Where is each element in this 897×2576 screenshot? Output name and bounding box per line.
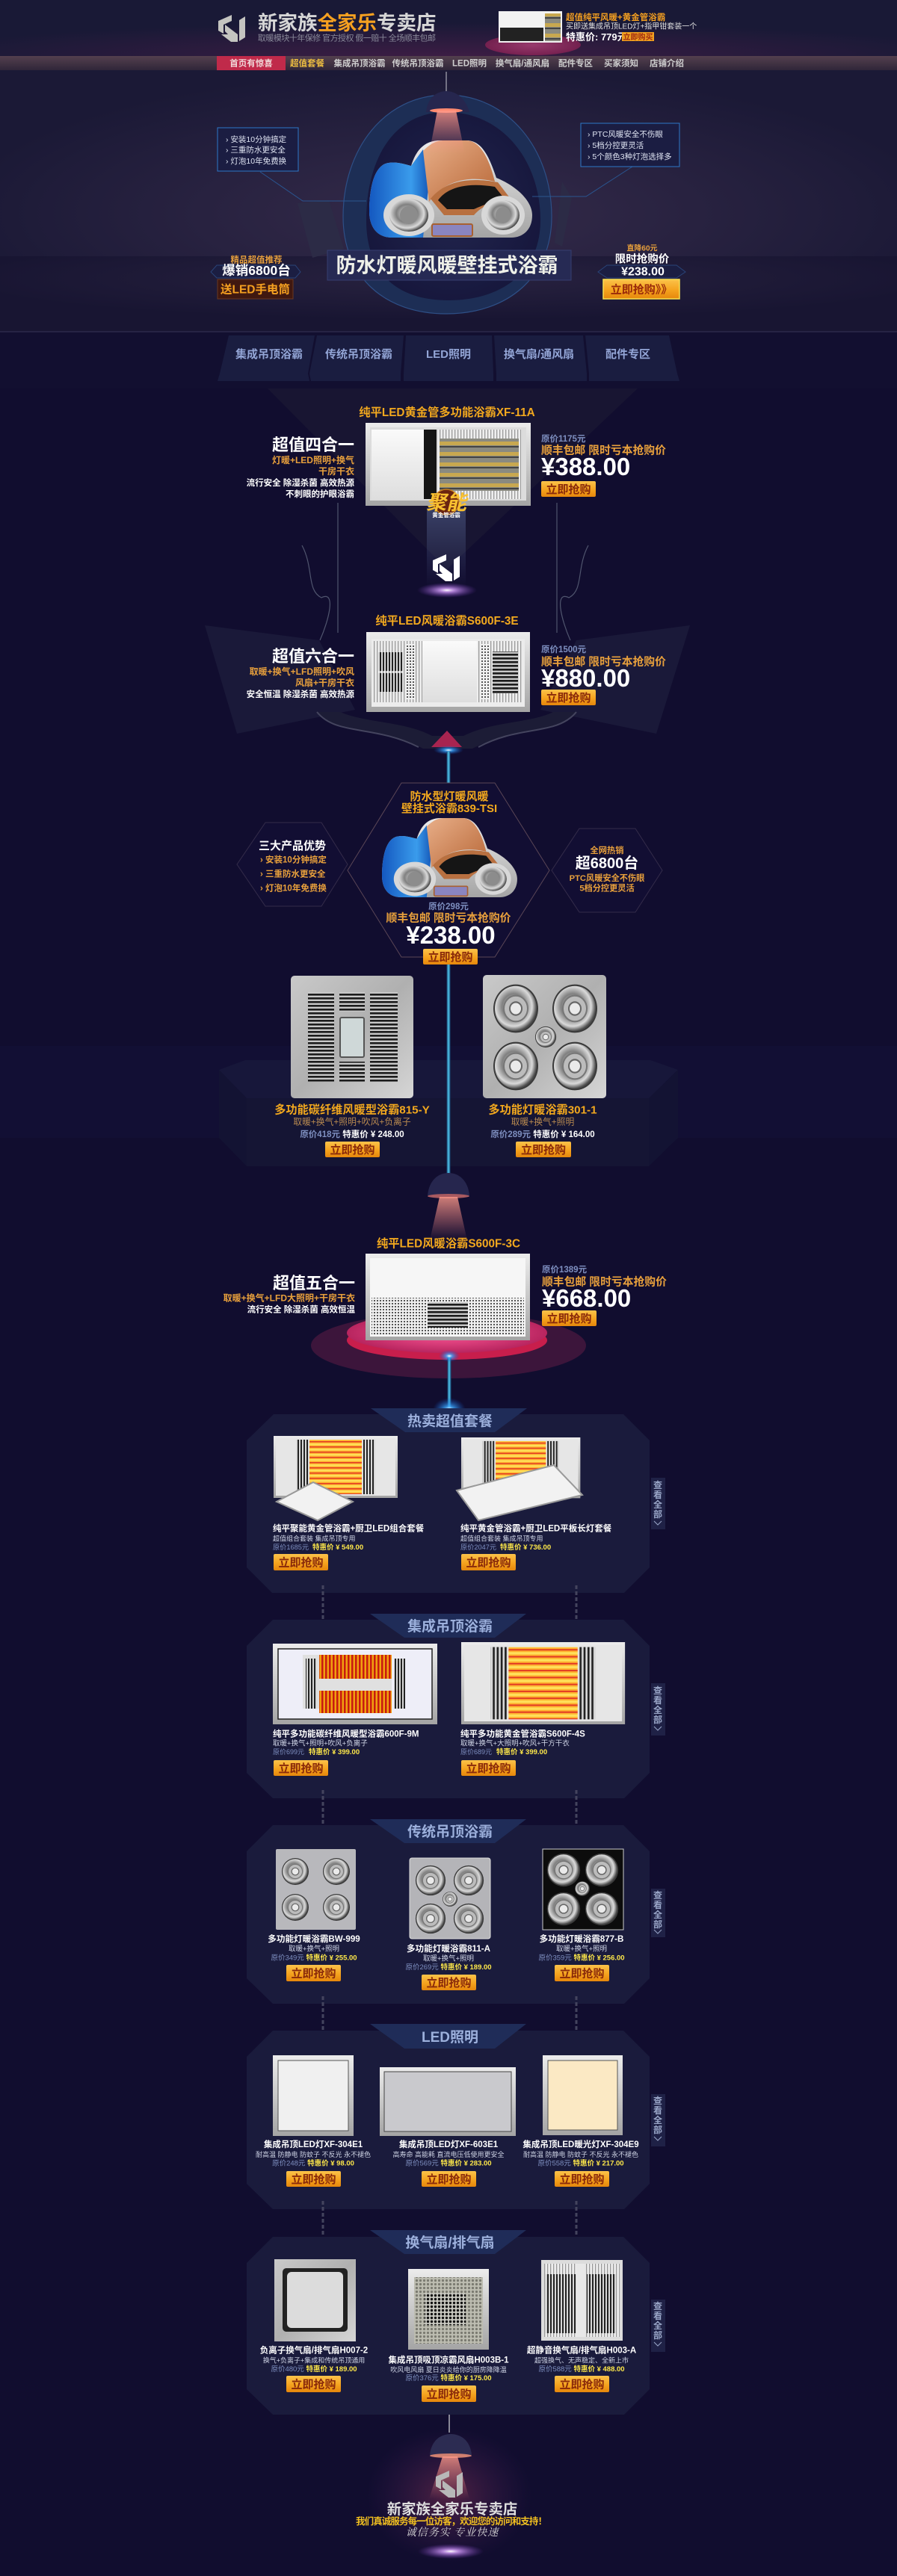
product XF-304E1 text bbox=[256, 2139, 371, 2187]
hero left badge: 送LED手电筒 bbox=[221, 282, 290, 296]
footer bbox=[356, 2415, 547, 2563]
view all tab: 全 bbox=[653, 2114, 662, 2125]
hero product bbox=[369, 140, 532, 238]
view all tab bbox=[651, 1889, 665, 1937]
bundle 1 text: 原价1685元 bbox=[273, 1544, 309, 1551]
store slogan: 取暖模块十年保修 官方授权 假一赔十 全场顺丰包邮 bbox=[258, 33, 436, 43]
product H003B-1 text: 原价376元 特惠价 ¥ 175.00 bbox=[405, 2374, 492, 2383]
navigation bar: 店铺介绍 bbox=[650, 58, 684, 69]
815-Y image bbox=[291, 976, 413, 1098]
product H003-A image bbox=[541, 2260, 623, 2341]
navigation bar: 超值套餐 bbox=[290, 58, 324, 69]
product H007-2 text: 原价480元 特惠价 ¥ 189.00 bbox=[271, 2365, 357, 2374]
banner bbox=[371, 1408, 527, 1432]
product 811-A text: 多功能灯暖浴霸811-A bbox=[407, 1943, 491, 1954]
centre price: ¥238.00 bbox=[406, 921, 496, 949]
chains 1 bbox=[323, 1585, 576, 1632]
navigation bar: 集成吊顶浴霸 bbox=[333, 58, 386, 69]
right callout connector bbox=[532, 167, 632, 196]
product H007-2 text: 立即抢购 bbox=[291, 2377, 336, 2391]
centre price: 立即抢购 bbox=[428, 950, 473, 964]
navigation bar: 首页有惊喜 bbox=[229, 58, 273, 69]
side metallic ornaments bbox=[302, 503, 588, 640]
category tabs: 换气扇/通风扇 bbox=[504, 347, 574, 361]
hero lamp bbox=[426, 91, 469, 154]
right sales hexagon: 超6800台 bbox=[576, 854, 638, 872]
product H007-2 text: 换气+负离子+集成和传统吊顶通用 bbox=[263, 2356, 365, 2364]
bundle 2 image bbox=[457, 1437, 582, 1520]
background triangle bbox=[268, 388, 638, 569]
bundle 2 text: 原价2047元 bbox=[460, 1544, 496, 1551]
product 811-A text: 立即抢购 bbox=[426, 1976, 472, 1990]
footer store name: 新家族全家乐专卖店 bbox=[387, 2501, 517, 2518]
view all tab bbox=[651, 1683, 665, 1736]
301-1 text: 取暖+换气+照明 bbox=[511, 1116, 574, 1127]
product XF-603E1 text: 集成吊顶LED灯XF-603E1 bbox=[399, 2139, 499, 2149]
product 877-B image bbox=[543, 1849, 623, 1930]
view all tab: 全 bbox=[653, 1909, 662, 1920]
S600F-3C price: 立即抢购 bbox=[546, 1312, 592, 1325]
centre product bbox=[382, 818, 517, 897]
product 2 price: 立即抢购 bbox=[546, 691, 591, 705]
S600F-3C price: ¥668.00 bbox=[542, 1284, 631, 1312]
heading: 集成吊顶浴霸 bbox=[407, 1617, 493, 1635]
product 811-A image bbox=[410, 1858, 490, 1939]
product S600F-4S text: 立即抢购 bbox=[466, 1762, 511, 1775]
product S600F-3C bbox=[224, 1237, 667, 1340]
hero right price badge: 立即抢购》》 bbox=[611, 282, 672, 296]
right sales hexagon bbox=[552, 829, 662, 912]
bundle 1 text bbox=[273, 1523, 425, 1570]
S600F-3C image bbox=[366, 1254, 530, 1340]
301-1 text: 多功能灯暖浴霸301-1 bbox=[488, 1103, 597, 1116]
product H003-A text: 超强换气、无声稳定、全新上市 bbox=[534, 2356, 629, 2364]
view all tab: 全 bbox=[653, 1499, 662, 1510]
product 2 benefits: 风扇+干房干衣 bbox=[295, 677, 354, 688]
product 301-1 bbox=[483, 975, 606, 1157]
product XF-603E1 text bbox=[392, 2139, 505, 2187]
product 600F-9M text: 原价699元 bbox=[273, 1748, 304, 1756]
navigation bar: 买家须知 bbox=[604, 58, 638, 69]
815-Y text: 原价418元 特惠价 ¥ 248.00 bbox=[300, 1129, 404, 1139]
chains 2 bbox=[323, 1790, 576, 1834]
footer glow bbox=[418, 2544, 484, 2559]
product 600F-9M image bbox=[273, 1644, 437, 1724]
footer lamp bbox=[429, 2434, 472, 2499]
product 877-B text: 原价359元 特惠价 ¥ 256.00 bbox=[538, 1953, 625, 1962]
product XF-304E9 text: 集成吊顶LED暖光灯XF-304E9 bbox=[523, 2139, 639, 2149]
product BW-999 image bbox=[276, 1849, 356, 1930]
product 1 price: 原价1175元 bbox=[541, 434, 586, 444]
view all tab: 看 bbox=[653, 1899, 662, 1910]
view all tab: 部 bbox=[653, 1714, 662, 1725]
header promo text: 特惠价: 779元 bbox=[566, 31, 627, 43]
hero right price badge: ¥238.00 bbox=[621, 266, 665, 278]
product 2 benefits: 安全恒温 除湿杀菌 高效热源 bbox=[247, 689, 354, 699]
right callout: › 5个颜色3种灯泡选择多 bbox=[588, 152, 672, 161]
navigation bar: 配件专区 bbox=[558, 58, 593, 69]
product 2 image bbox=[366, 632, 530, 712]
category tabs: LED照明 bbox=[426, 348, 471, 361]
view all tab bbox=[651, 1478, 665, 1529]
view all tab: 全 bbox=[653, 2320, 662, 2331]
chains 4 bbox=[323, 2201, 576, 2245]
left feature hexagon bbox=[237, 823, 348, 906]
bundle 1 text: 纯平聚能黄金管浴霸+厨卫LED组合套餐 bbox=[273, 1523, 425, 1533]
S600F-3C price: 原价1389元 bbox=[542, 1265, 588, 1275]
panel: 热卖超值套餐 bbox=[247, 1408, 665, 1593]
blue connector line A bbox=[447, 752, 450, 783]
product XF-304E1 text: 原价248元 特惠价 ¥ 98.00 bbox=[272, 2159, 354, 2168]
product 2 benefits bbox=[247, 647, 354, 699]
product H003-A text: 超静音换气扇/排气扇H003-A bbox=[527, 2344, 636, 2355]
product H003B-1 image bbox=[408, 2269, 489, 2350]
product H003-A text: 立即抢购 bbox=[559, 2377, 605, 2391]
footer motto: 诚信务实 专业快速 bbox=[406, 2527, 499, 2539]
navigation bar: 换气扇/通风扇 bbox=[496, 58, 549, 69]
right callout: › 5档分控更灵活 bbox=[588, 140, 644, 150]
product 2 price bbox=[541, 645, 666, 705]
view all tab: 看 bbox=[653, 2105, 662, 2116]
product XF-304E9 text: 耐高温 防静电 防蚊子 不反光 永不褪色 bbox=[523, 2150, 638, 2158]
product S600F-4S image bbox=[461, 1642, 625, 1724]
category tabs: 集成吊顶浴霸 bbox=[235, 347, 303, 361]
header promo text: 买即送集成吊顶LED灯+指甲钳套装一个 bbox=[566, 21, 697, 31]
header promo text bbox=[566, 12, 697, 43]
product XF-304E1 text: 耐高温 防静电 防蚊子 不反光 永不褪色 bbox=[256, 2150, 371, 2158]
product S600F-4S text: 纯平多功能黄金管浴霸S600F-4S bbox=[460, 1729, 585, 1739]
category tabs bbox=[0, 332, 897, 388]
815-Y text: 立即抢购 bbox=[330, 1143, 375, 1157]
panel: LED照明 bbox=[247, 2024, 665, 2209]
bundle 2 text: 立即抢购 bbox=[466, 1555, 511, 1569]
left callout: › 安装10分钟搞定 bbox=[226, 134, 287, 144]
hero ring bbox=[343, 95, 552, 314]
product XF-304E1 text: 集成吊顶LED灯XF-304E1 bbox=[264, 2139, 363, 2149]
view all tab: 全 bbox=[653, 1704, 662, 1715]
hero title banner: 防水灯暖风暖壁挂式浴霸 bbox=[336, 254, 558, 276]
right sales hexagon: 全网热销 bbox=[590, 845, 624, 855]
product 1 price: 立即抢购 bbox=[546, 483, 591, 496]
product BW-999 text: 原价349元 特惠价 ¥ 255.00 bbox=[271, 1953, 357, 1962]
product 811-A text bbox=[405, 1943, 492, 1990]
product 877-B text: 多功能灯暖浴霸877-B bbox=[540, 1933, 623, 1944]
product H003B-1 text: 立即抢购 bbox=[426, 2388, 472, 2401]
product 1 benefits bbox=[247, 436, 354, 499]
header band bbox=[0, 0, 897, 56]
bundle 1 text: 超值组合套装 集成吊顶专用 bbox=[273, 1535, 356, 1542]
product 877-B text bbox=[538, 1933, 625, 1981]
product S600F-4S text: 取暖+换气+大照明+吹风+干方干衣 bbox=[460, 1739, 570, 1748]
product 1 price bbox=[541, 434, 666, 497]
view all tab: 查 bbox=[653, 1685, 662, 1696]
view all tab: 查 bbox=[653, 2300, 662, 2312]
centre price bbox=[386, 902, 511, 965]
store name: 新家族全家乐专卖店 bbox=[258, 12, 437, 34]
product 2 title: 纯平LED风暖浴霸S600F-3E bbox=[375, 614, 519, 628]
header promo product bbox=[499, 11, 562, 43]
S600F-3C benefits bbox=[224, 1274, 355, 1315]
footer message: 我们真诚服务每一位访客，欢迎您的访问和支持！ bbox=[356, 2515, 547, 2527]
energy badge: 黄金管浴霸 bbox=[432, 511, 460, 518]
product 600F-9M text: 特惠价 ¥ 399.00 bbox=[309, 1747, 360, 1756]
centre hexagon bbox=[348, 783, 549, 957]
product S600F-4S text bbox=[460, 1729, 585, 1776]
view all tab: 部 bbox=[653, 2329, 662, 2341]
bundle 2 text: 纯平黄金管浴霸+厨卫LED平板长灯套餐 bbox=[460, 1523, 612, 1533]
product 2 benefits: 取暖+换气+LFD照明+吹风 bbox=[250, 666, 354, 677]
bundle 1 text: 特惠价 ¥ 549.00 bbox=[312, 1543, 363, 1552]
view all tab: 部 bbox=[653, 1919, 662, 1930]
product XF-304E9 text bbox=[523, 2139, 639, 2187]
centre title: 防水型灯暖风暖 bbox=[410, 790, 489, 803]
product 1 benefits: 干房干衣 bbox=[318, 465, 354, 477]
view all tab: 看 bbox=[653, 1694, 662, 1706]
heading: 换气扇/排气扇 bbox=[405, 2234, 495, 2251]
lamp bbox=[428, 1173, 469, 1240]
navigation bar: 传统吊顶浴霸 bbox=[392, 58, 444, 69]
product XF-603E1 text: 原价569元 特惠价 ¥ 283.00 bbox=[405, 2159, 492, 2168]
view all tab: 部 bbox=[653, 1508, 662, 1520]
815-Y text bbox=[274, 1103, 430, 1157]
product 600F-9M text: 纯平多功能碳纤维风暖型浴霸600F-9M bbox=[273, 1729, 419, 1739]
product H007-2 text bbox=[260, 2344, 368, 2392]
product S600F-4S text: 原价689元 bbox=[460, 1748, 492, 1756]
815-Y text: 多功能碳纤维风暖型浴霸815-Y bbox=[274, 1103, 430, 1116]
product 811-A text: 取暖+换气+照明 bbox=[423, 1954, 474, 1963]
product H003-A text: 原价588元 特惠价 ¥ 488.00 bbox=[538, 2365, 625, 2374]
hero section bbox=[0, 70, 897, 332]
product 600F-9M text: 取暖+换气+照明+吹风+负离子 bbox=[273, 1739, 368, 1748]
product XF-603E1 text: 立即抢购 bbox=[426, 2173, 472, 2186]
left feature hexagon: › 灯泡10年免费换 bbox=[260, 883, 327, 894]
product 1 image bbox=[366, 423, 531, 506]
left callout: › 灯泡10年免费换 bbox=[226, 156, 287, 166]
product H007-2 image bbox=[274, 2259, 356, 2341]
301-1 text: 原价289元 特惠价 ¥ 164.00 bbox=[490, 1129, 595, 1139]
product 1 benefits: 灯暖+LED照明+换气 bbox=[272, 454, 354, 465]
hero left badge bbox=[211, 254, 300, 299]
side crystals bbox=[298, 182, 572, 258]
product S600F-4S text: 特惠价 ¥ 399.00 bbox=[496, 1747, 547, 1756]
heading: 传统吊顶浴霸 bbox=[407, 1823, 493, 1840]
pink platform bbox=[311, 1313, 586, 1378]
product 1 benefits: 不刺眼的护眼浴霸 bbox=[286, 489, 354, 499]
815-Y text: 取暖+换气+照明+吹风+负离子 bbox=[293, 1116, 411, 1127]
product 1 price: ¥388.00 bbox=[541, 453, 630, 480]
right sales hexagon: PTC风暖安全不伤眼 bbox=[570, 873, 644, 883]
navigation bar bbox=[0, 56, 897, 70]
bundle 2 text: 特惠价 ¥ 736.00 bbox=[500, 1543, 551, 1552]
right callout: › PTC风暖安全不伤眼 bbox=[588, 129, 663, 139]
product 811-A text: 原价269元 特惠价 ¥ 189.00 bbox=[405, 1963, 492, 1972]
301-1 text bbox=[488, 1103, 597, 1157]
connector ornament bbox=[317, 712, 576, 755]
view all tab: 查 bbox=[653, 2095, 662, 2106]
store logo bbox=[218, 15, 245, 42]
centre title bbox=[401, 790, 497, 815]
header promo text: 超值纯平风暖+黄金管浴霸 bbox=[566, 12, 665, 22]
product 2 price: 原价1500元 bbox=[541, 645, 587, 654]
panel: 传统吊顶浴霸 bbox=[247, 1819, 665, 2004]
product 877-B text: 取暖+换气+照明 bbox=[556, 1944, 607, 1953]
bundle 1 text: 立即抢购 bbox=[278, 1555, 324, 1569]
banner bbox=[370, 1819, 526, 1843]
product H003B-1 text: 吹风电风扇 夏日炎炎给你的厨房降降温 bbox=[390, 2365, 507, 2374]
footer logo bbox=[436, 2471, 463, 2498]
view all tab bbox=[651, 2094, 665, 2146]
star and blue connector line bbox=[433, 1350, 466, 1422]
S600F-3C title: 纯平LED风暖浴霸S600F-3C bbox=[377, 1237, 520, 1251]
centre price: 顺丰包邮 限时亏本抢购价 bbox=[386, 911, 511, 925]
blue connector line B bbox=[447, 964, 450, 1174]
product XF-304E1 text: 立即抢购 bbox=[291, 2173, 336, 2186]
S600F-3C benefits: 流行安全 除湿杀菌 高效恒温 bbox=[247, 1304, 355, 1315]
product H003B-1 text: 集成吊顶吸顶凉霸风扇H003B-1 bbox=[388, 2355, 509, 2365]
header promo text: 立即购买 bbox=[623, 32, 653, 42]
panel: 换气扇/排气扇 bbox=[247, 2230, 665, 2415]
view all tab bbox=[651, 2300, 665, 2352]
heading: LED照明 bbox=[422, 2030, 478, 2046]
product 600F-9M text: 立即抢购 bbox=[278, 1762, 324, 1775]
column logo bbox=[433, 554, 460, 581]
301-1 image bbox=[483, 975, 606, 1098]
hero left badge: 精品超值推荐 bbox=[230, 254, 283, 264]
product 877-B text: 立即抢购 bbox=[559, 1966, 605, 1980]
S600F-3C benefits: 取暖+换气+LFD大照明+干房干衣 bbox=[224, 1292, 355, 1303]
product 815-Y bbox=[274, 976, 430, 1157]
product H003B-1 text bbox=[388, 2355, 509, 2402]
product 1 title: 纯平LED黄金管多功能浴霸XF-11A bbox=[359, 406, 535, 419]
energy badge: 聚能 bbox=[426, 492, 469, 514]
right sales hexagon: 5档分控更灵活 bbox=[579, 883, 635, 894]
wall heater section bbox=[237, 783, 662, 965]
left feature hexagon: 三大产品优势 bbox=[259, 839, 326, 852]
banner bbox=[370, 1614, 526, 1638]
right callout bbox=[581, 123, 679, 167]
product 1 benefits: 超值四合一 bbox=[272, 436, 354, 454]
view all tab: 看 bbox=[653, 1489, 662, 1500]
view all tab: 查 bbox=[653, 1479, 662, 1490]
bundle 1 image bbox=[274, 1436, 398, 1520]
product 1 benefits: 流行安全 除湿杀菌 高效热源 bbox=[247, 477, 354, 488]
header promo glow bbox=[485, 34, 581, 55]
product XF-603E1 image bbox=[380, 2067, 516, 2136]
product 1: XF-11A bbox=[247, 406, 666, 598]
view all tab: 部 bbox=[653, 2124, 662, 2135]
centre price: 原价298元 bbox=[428, 902, 469, 911]
product 2 price: ¥880.00 bbox=[541, 664, 630, 692]
pedestal bbox=[219, 1060, 678, 1166]
column glow bbox=[417, 583, 477, 598]
category tabs: 传统吊顶浴霸 bbox=[325, 347, 392, 361]
S600F-3C benefits: 超值五合一 bbox=[273, 1274, 355, 1292]
left callout bbox=[218, 128, 298, 171]
banner bbox=[370, 2024, 526, 2049]
hero left badge: 爆销6800台 bbox=[222, 263, 291, 278]
product XF-304E1 image bbox=[273, 2055, 354, 2136]
bundle 2 text bbox=[460, 1523, 612, 1570]
product 600F-9M text bbox=[273, 1729, 419, 1776]
product 1 price: 顺丰包邮 限时亏本抢购价 bbox=[541, 444, 666, 457]
301-1 text: 立即抢购 bbox=[521, 1143, 566, 1157]
product XF-304E9 text: 原价558元 特惠价 ¥ 217.00 bbox=[537, 2159, 624, 2168]
S600F-3C price: 顺丰包邮 限时亏本抢购价 bbox=[542, 1275, 667, 1288]
product BW-999 text: 立即抢购 bbox=[291, 1966, 336, 1980]
shelf shade bbox=[0, 1046, 897, 1138]
view all tab: 查 bbox=[653, 1889, 662, 1901]
hero right price badge bbox=[598, 244, 685, 299]
left callout: › 三重防水更安全 bbox=[226, 145, 286, 155]
hero title banner bbox=[327, 250, 571, 280]
left feature hexagon: › 安装10分钟搞定 bbox=[260, 855, 327, 865]
product H003-A text bbox=[527, 2344, 636, 2392]
S600F-3C price bbox=[542, 1265, 667, 1326]
hero right price badge: 限时抢购价 bbox=[615, 253, 670, 266]
category tabs: 配件专区 bbox=[605, 347, 650, 361]
product 2: S600F-3E bbox=[247, 614, 666, 712]
product 2 benefits: 超值六合一 bbox=[272, 647, 354, 666]
product XF-304E9 image bbox=[543, 2055, 623, 2135]
chains 3 bbox=[323, 1996, 576, 2040]
left callout connector bbox=[260, 172, 366, 201]
heading: 热卖超值套餐 bbox=[407, 1414, 493, 1430]
hero right price badge: 直降60元 bbox=[626, 244, 658, 253]
navigation bar: LED照明 bbox=[452, 58, 487, 69]
view all tab: 看 bbox=[653, 2310, 662, 2321]
product BW-999 text: 多功能灯暖浴霸BW-999 bbox=[268, 1933, 360, 1944]
panel: 集成吊顶浴霸 bbox=[247, 1614, 665, 1798]
light column bbox=[427, 508, 466, 587]
product BW-999 text bbox=[268, 1933, 360, 1981]
product H007-2 text: 负离子换气扇/排气扇H007-2 bbox=[260, 2344, 368, 2355]
bundle 2 text: 超值组合套装 集成吊顶专用 bbox=[460, 1535, 543, 1542]
centre title: 壁挂式浴霸839-TSI bbox=[401, 802, 497, 815]
left feature hexagon: › 三重防水更安全 bbox=[260, 868, 326, 879]
product 2 price: 顺丰包邮 限时亏本抢购价 bbox=[541, 654, 666, 668]
product BW-999 text: 取暖+换气+照明 bbox=[289, 1944, 339, 1953]
banner bbox=[370, 2230, 526, 2254]
product XF-304E9 text: 立即抢购 bbox=[559, 2173, 605, 2186]
product XF-603E1 text: 高寿命 高能耗 直流电压低使用更安全 bbox=[392, 2150, 505, 2158]
side background blocks bbox=[205, 625, 690, 734]
